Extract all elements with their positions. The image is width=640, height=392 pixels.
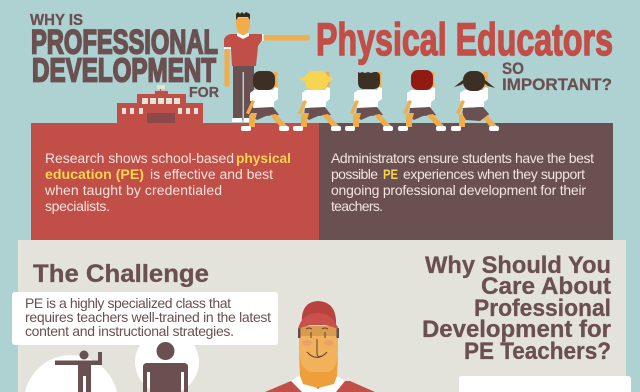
panel: research: physical <box>236 150 291 166</box>
heading: why should you care: Development for <box>422 316 611 343</box>
figure: student 5 <box>451 71 499 131</box>
heading: why should you care: Professional <box>474 295 611 322</box>
panel: administrators: experiences when they support <box>403 166 585 182</box>
title: why is professional development for <box>30 12 219 101</box>
title: why is professional development for: WHY IS <box>30 12 83 29</box>
figure: teacher <box>224 12 310 122</box>
title: why is professional development for: PROFESSIONAL <box>31 24 218 62</box>
icon: pointing instructor in circle <box>25 350 117 392</box>
heading: why should you care: Care About <box>481 273 611 300</box>
icon: standing person in circle <box>135 342 199 392</box>
figure: student 2 <box>293 71 341 131</box>
heading: why should you care <box>422 252 611 365</box>
panel: research: Research shows school-based <box>45 150 234 166</box>
heading: why should you care: Why Should You <box>425 252 611 279</box>
panel: research: specialists. <box>45 198 110 214</box>
panel: research: is effective and best <box>150 166 273 182</box>
panel: administrators: Administrators ensure students have the best <box>331 150 594 166</box>
title: why is professional development for: FOR <box>189 84 219 101</box>
panel: administrators <box>319 123 613 240</box>
heading: the challenge: The Challenge <box>33 260 209 288</box>
callout: pe is highly specialized: PE is a highly specialized class that <box>25 295 231 311</box>
icon: school building <box>117 85 203 124</box>
figure: student 4 <box>398 70 446 131</box>
callout: pe is highly specialized: content and instructional strategies. <box>25 323 234 339</box>
panel: administrators: possible <box>331 166 378 182</box>
title: why is professional development for: DEVELOPMENT <box>32 52 216 90</box>
panel: lower section background <box>18 240 626 392</box>
callout: pe is highly specialized: requires teachers well-trained in the latest <box>25 309 271 325</box>
panel: research <box>31 123 320 240</box>
figure: student 3 <box>345 71 393 131</box>
title: so important: SO <box>502 60 524 78</box>
panel: administrators: PE <box>383 166 398 182</box>
figure: student 1 <box>241 71 289 131</box>
title: so important <box>502 60 612 94</box>
panel: research: education (PE) <box>45 166 144 182</box>
title: so important: IMPORTANT? <box>502 76 612 94</box>
panel: white box lower right <box>459 376 631 392</box>
figure: coach <box>265 301 375 392</box>
panel: administrators: teachers. <box>331 198 383 214</box>
heading: why should you care: PE Teachers? <box>464 338 611 365</box>
panel: administrators: ongoing professional development for their <box>331 182 586 198</box>
callout: pe is highly specialized <box>12 292 278 345</box>
panel: research: when taught by credentialed <box>44 182 222 198</box>
